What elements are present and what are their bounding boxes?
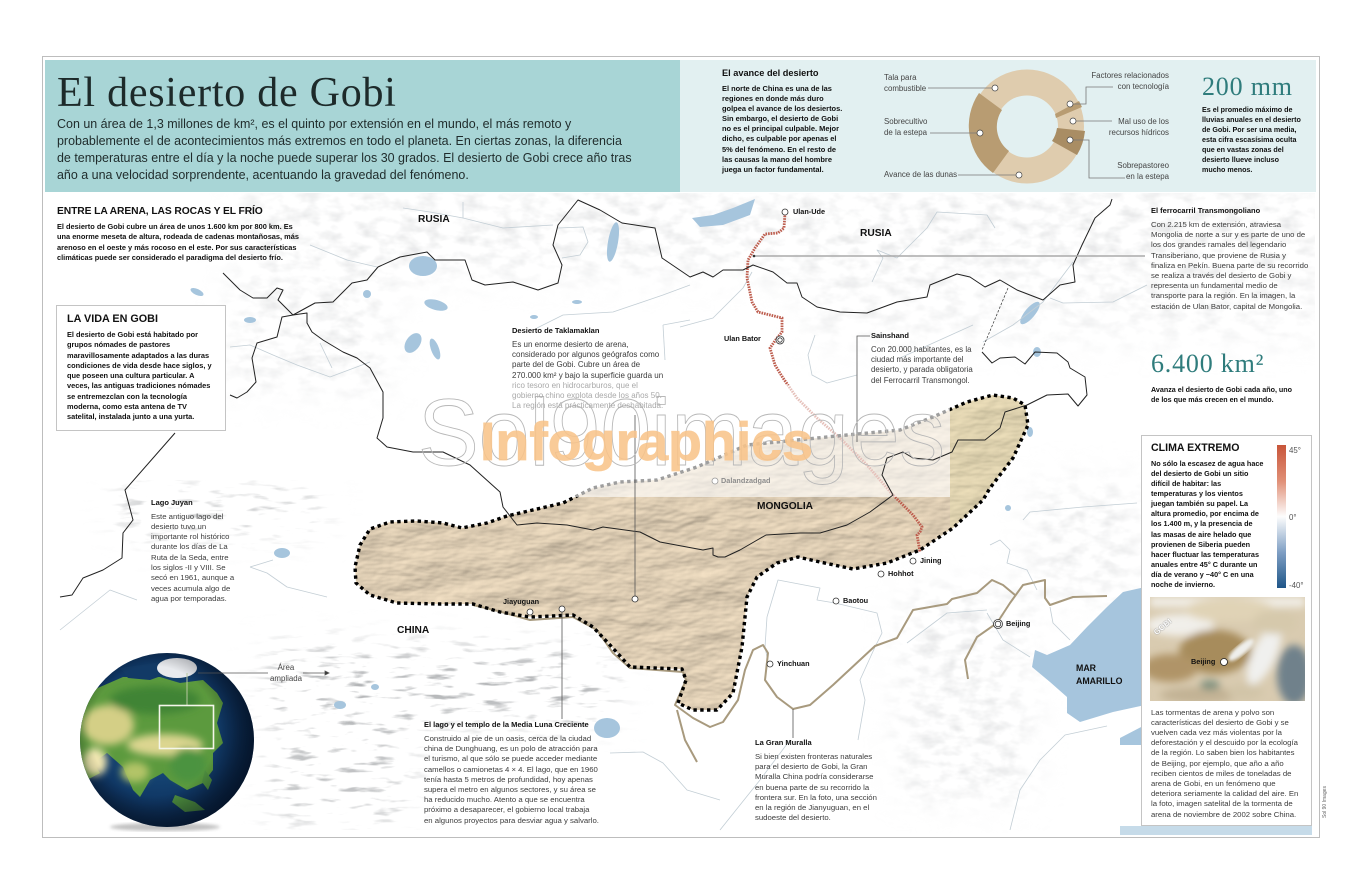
rivers [60,202,1147,830]
heading: LA VIDA EN GOBI [67,313,158,325]
sea: Mar Amarillo [1032,587,1145,722]
borders [60,199,1112,597]
map [60,193,1315,835]
temperature scale [1277,445,1304,590]
map relief texture [45,193,1315,833]
text: taklamaklan: Desierto de Taklamaklan [512,326,599,335]
text: Yinchuan [777,659,810,668]
desert dotted outline [355,395,1028,710]
leader lines [562,256,1145,738]
heading: entre la arena: ENTRE LA ARENA, LAS ROCAS Y EL FRÍO [57,206,263,217]
text: Hohhot [888,569,914,578]
text: entre la arena: El desierto de Gobi cubre un área de unos 1.600 km por 800 km. Es una enorme meseta de altura, rodeada de cadenas montañosas, más arenoso en el oeste y más rocoso en el este. Por sus características climáticas puede ser considerado el paradigma del desierto frío. [57,222,299,262]
text: CHINA [397,625,429,636]
panel: la vida en gobi [56,305,226,431]
text: MAR AMARILLO [1076,663,1122,686]
text: Es un enorme desierto de arena, considerado por algunos geógrafos como parte del de Gobi. Cubre un área de 270.000 km² y bajo la superficie guarda un rico tesoro en hidrocarburos, que el gobierno chino explota desde los años 50. La región está prácticamente deshabitada. [512,340,663,410]
text: Jining [920,556,942,565]
text: Construido al pie de un oasis, cerca de la ciudad china de Dunghuang, es un polo de atracción para el turismo, al que sólo se puede acceder mediante camellos o camionetas 4 × 4. El lago, que en 1960 tenía hasta 5 metros de profundidad, hoy apenas supera el metro en algunos sectores, y su área se ha reducido mucho. Atento a que se encuentra próximo a desaparecer, el gobierno local trabaja en algunos proyectos para desviar agua y salvarlo. [424,734,599,825]
text: Ulan Bator [724,334,761,343]
heading: CLIMA EXTREMO [1151,442,1239,454]
donut chart [928,70,1125,184]
text: RUSIA [418,214,450,225]
text: MONGOLIA [757,501,813,512]
heading: el avance del desierto: El avance del desierto [722,68,819,78]
great wall [473,580,1107,762]
panel: clima extremo [1141,435,1312,826]
text: No sólo la escasez de agua hace del desierto de Gobi un sitio difícil de habitar: las temperaturas y los vientos juegan también su papel. La altura promedio, por encima de los 1.400 m, y la presencia de las masas de aire helado que provienen de Siberia pueden hacer fluctuar las temperaturas anuales entre 45° C durante un día de verano y −40° C en una noche de invierno. [1151,458,1263,589]
intro text: Con un área de 1,3 millones de km², es el quinto por extensión en el mundo, el más remoto y probablemente el de acontecimientos más extremos en todo el planeta. En ciertas zonas, la diferencia de temperaturas entre el día y la noche puede superar los 30 grados. El desierto de Gobi crece año tras año a una velocidad sorprendente, acentuando la gravedad del fenómeno. [57,117,632,182]
donut labels left: Tala para combustible [884,73,926,93]
text: Con 2.215 km de extensión, atraviesa Mongolia de norte a sur y es parte de uno de los dos grandes ramales del legendario Transiberiano, que proviene de Rusia y finaliza en Pekín. Buena parte de su recorrido se realiza a través del desierto de Gobi y representa un fundamental medio de transporte para la región. En la imagen, la estación de Ulan Bator, capital de Mongolia. [1151,220,1308,311]
watermark wash [418,385,950,497]
text: tormentas: Las tormentas de arena y polvo son características del desierto de Gobi y se vuelven cada vez más violentas por la deforestación y el descuido por la ecología de la región. Lo saben bien los habitantes de Beijing, por ejemplo, que año a año reciben cientos de miles de toneladas de arena de Gobi, en un fenómeno que deteriora seriamente la calidad del aire. En la foto, imagen satelital de la tormenta de arena de noviembre de 2002 sobre China. [1151,708,1298,819]
arrow: area ampliada [198,671,329,675]
text: ferrocarril: El ferrocarril Transmongoliano [1151,206,1260,215]
text: Beijing [1006,619,1030,628]
text: Ulan-Ude [793,207,825,216]
railway [747,213,922,552]
text: Este antiguo lago del desierto tuvo un importante rol histórico durante los días de La Ruta de la Seda, entre los siglos -II y VIII. Se secó en 1961, aunque a veces acumula algo de agua por temporadas. [151,512,234,603]
text: Con 20.000 habitantes, es la ciudad más importante del desierto, y parada obligatoria del Ferrocarril Transmongol. [871,345,973,385]
text: gran muralla: La Gran Muralla [755,738,812,747]
globe [78,650,255,831]
watermark: Infographics [480,412,813,472]
text: Sobrepastoreo en la estepa [1117,161,1169,181]
temperature scale: -40° [1289,581,1304,590]
city markers [527,209,1002,667]
segment: sobrecultivo [969,93,1009,173]
text: sainshand: Sainshand [871,331,909,340]
text: Baotou [843,596,868,605]
satellite image [1150,597,1305,701]
text: GOBI [1152,617,1173,637]
temperature scale: 0° [1289,513,1297,522]
text: Mal uso de los recursos hídricos [1109,117,1169,137]
satellite labels: Beijing [1191,657,1215,666]
text: avance: El norte de China es una de las regiones en donde más duro golpea el avance de los desiertos. Sin embargo, el desierto de Gobi no es el principal culpable. Mejor dicho, es culpable por apenas el 5% del fenómeno. En el resto de las causas la mano del hombre juega un factor fundamental. [722,84,842,174]
watermark: Sol90images [418,380,945,486]
text: 200 mm: Es el promedio máximo de lluvias anuales en el desierto de Gobi. Por ser una media, esta cifra escasísima oculta que en vastas zonas del desierto llueve incluso mucho menos. [1202,106,1301,174]
title: El desierto de Gobi [57,70,397,116]
text: lago juyan: Lago Juyan [151,498,193,507]
donut labels right: Factores relacionados con tecnología [1091,71,1169,91]
text: RUSIA [860,228,892,239]
desert area [350,390,1040,715]
text: 6.400 km2: Avanza el desierto de Gobi cada año, uno de los que más crecen en el mundo. [1151,386,1292,404]
credit: Sol 90 Images [1322,786,1328,818]
text: Sobrecultivo de la estepa [884,117,927,137]
label: area ampliada: Área ampliada [270,663,302,682]
lakes [189,199,1043,738]
text: Jiayuguan [503,597,539,606]
segment: factores [1055,101,1082,118]
stat: 6.400 km2: 6.400 km² [1151,349,1264,378]
text: media luna creciente: El lago y el templo de la Media Luna Creciente [424,720,589,729]
temperature scale: 45° [1289,446,1301,455]
segment: sobrepastoreo [1052,128,1085,155]
stat: 200 mm: 200 mm [1202,72,1293,101]
text: Dalandzadgad [721,476,770,485]
text: Si bien existen fronteras naturales para el desierto de Gobi, la Gran Muralla China podría considerarse en buena parte de su recorrido la frontera sur. En la foto, una sección en la región de Jianyuguan, en el sudoeste del desierto. [755,752,877,822]
map labels [397,207,1122,686]
header right panel [680,60,1316,192]
header left panel [45,60,680,192]
text: Avance de las dunas [884,170,957,179]
text: El desierto de Gobi está habitado por grupos nómades de pastores maravillosamente adaptados a las duras condiciones de vida desde hace siglos, y que poseen una cultura particular. A veces, las antiguas tradiciones nómades se entremezclan con la tecnología moderna, como esta antena de TV satelital, instalada junto a una yurta. [67,330,212,421]
